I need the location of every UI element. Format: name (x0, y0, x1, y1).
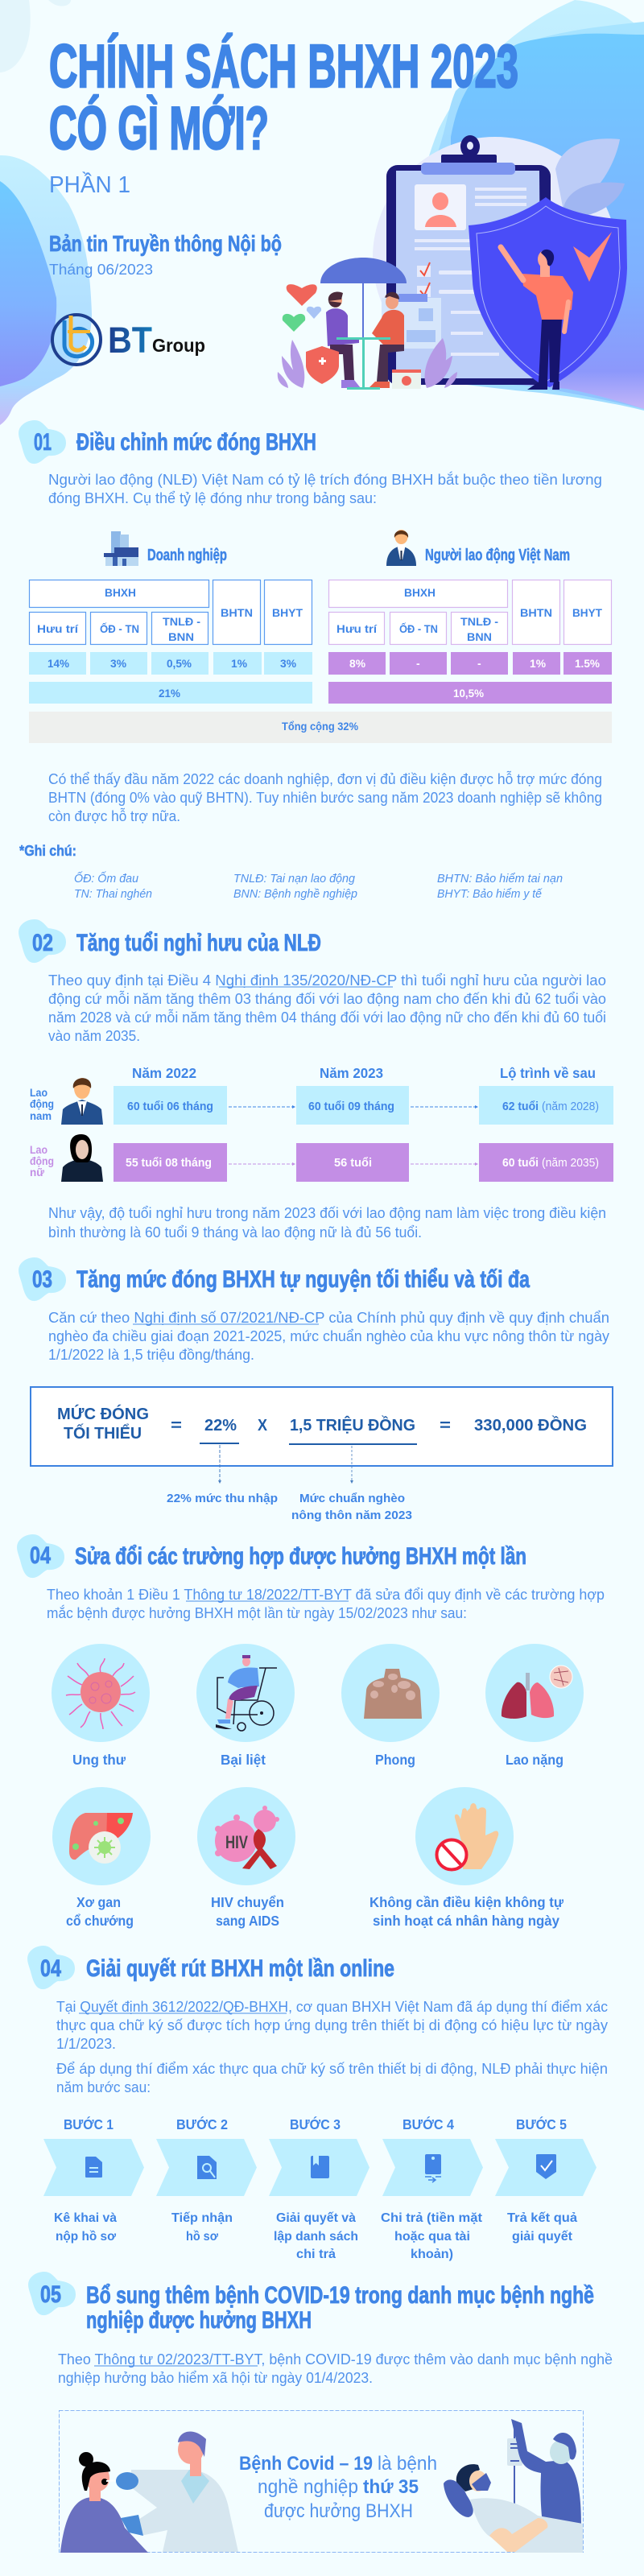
step 3: Giải quyết và (276, 2211, 356, 2225)
section 04b intro text: Để áp dụng thí điểm xác thực qua chữ ký số trên thiết bị di động, NLĐ phải thực hiện (56, 2061, 608, 2077)
step 1: BƯỚC 1 (64, 2116, 114, 2132)
notes legend (74, 871, 563, 901)
card: unable to self-care (369, 1787, 564, 1929)
table: employee contribution: 8% (349, 657, 366, 670)
section 04 badge: 04 (30, 1542, 51, 1569)
card: HIV to AIDS (197, 1787, 295, 1929)
table: employee contribution: TNLĐ - (460, 615, 498, 628)
step 3: chi trả (296, 2248, 336, 2261)
section 01 explanation text: còn được hỗ trợ nữa. (48, 807, 180, 824)
table: company contribution: TNLĐ - (163, 615, 200, 628)
illustration: clipboard, shield and people (278, 135, 627, 390)
table: employee contribution: Hưu trí (336, 622, 378, 635)
logo: BT Group (52, 315, 205, 365)
subtitle: part: PHẦN 1 (49, 171, 130, 198)
row: male workers (30, 1078, 613, 1125)
card: cancer (52, 1644, 150, 1768)
title (49, 32, 518, 162)
formula box: X (258, 1417, 268, 1435)
illustration: swab test (60, 2431, 238, 2553)
table: company contribution: BNN (168, 630, 194, 643)
notes heading: *Ghi chú: (19, 843, 76, 859)
card: severe tuberculosis: Lao nặng (506, 1752, 564, 1768)
retirement timeline: Năm 2022 (132, 1065, 196, 1081)
row: male workers: 62 tuổi (502, 1100, 539, 1113)
card: unable to self-care: Không cần điều kiện không tự (369, 1894, 564, 1910)
card: unable to self-care: sinh hoạt cá nhân hàng ngày (373, 1913, 559, 1929)
section 03 intro text: 1/1/2022 là 1,5 triệu đồng/tháng. (48, 1347, 254, 1363)
notes legend: BHTN: Bảo hiểm tai nạn (437, 872, 563, 886)
section 01 badge: 01 (34, 429, 52, 456)
card: paralysis (196, 1644, 295, 1768)
total row (29, 712, 612, 743)
section 04b badge: 04 (40, 1955, 61, 1982)
step 5 (495, 2116, 597, 2244)
total row: Tổng cộng 32% (282, 720, 359, 733)
section 04b intro text (56, 1999, 608, 2095)
date: Tháng 06/2023 (49, 262, 153, 278)
row: female workers: nữ (30, 1166, 45, 1179)
section 01 intro text: Người lao động (NLĐ) Việt Nam có tỷ lệ trích đóng BHXH bắt buộc theo tiền lương (48, 471, 602, 488)
step 4: hoặc qua tài (394, 2230, 470, 2244)
formula box: 1,5 TRIỆU ĐỒNG (290, 1415, 415, 1435)
formula annotations: Mức chuẩn nghèo (299, 1492, 405, 1505)
section 05 intro text: Theo Thông tư 02/2023/TT-BYT, bệnh COVID-19 được thêm vào danh mục bệnh nghề (58, 2351, 613, 2368)
row: male workers: 60 tuổi 06 tháng (127, 1100, 213, 1113)
section 02 badge (19, 919, 66, 963)
section 01 explanation text: BHTN (đóng 0% vào quỹ BHTN). Tuy nhiên bước sang năm 2023 doanh nghiệp sẽ không (48, 790, 602, 806)
illustration: patient and nurse (444, 2419, 583, 2553)
card: cancer: Ung thư (72, 1752, 126, 1768)
step 3: BƯỚC 3 (290, 2116, 341, 2132)
section 01 explanation text (48, 770, 602, 824)
table: employee contribution: BNN (467, 630, 492, 643)
section 02 badge: 02 (32, 930, 53, 956)
card: HIV to AIDS: HIV chuyển (211, 1894, 284, 1910)
section 01 heading: Điều chỉnh mức đóng BHXH (76, 429, 316, 456)
section 02 intro text: năm 2028 và cứ mỗi năm tăng thêm 04 tháng đối với lao động nữ cho đến khi đủ 60 tuổi (48, 1009, 606, 1026)
table heading: employee: Người lao động Việt Nam (425, 547, 570, 564)
section 03 intro text: nghèo đa chiều giai đoạn 2021-2025, mức chuẩn nghèo của khu vực nông thôn từ ngày (48, 1328, 609, 1344)
row: male workers: Lao (30, 1086, 47, 1099)
logo: BT Group: Group (152, 335, 205, 356)
section 03 intro text: Căn cứ theo Nghị định số 07/2021/NĐ-CP của Chính phủ quy định về quy định chuẩn (48, 1310, 609, 1326)
notes legend: TNLĐ: Tai nạn lao động (233, 872, 356, 886)
table: employee contribution (328, 580, 612, 704)
covid callout panel (60, 2410, 583, 2553)
row: female workers: 56 tuổi (334, 1156, 372, 1170)
step 2: Tiếp nhận (171, 2211, 233, 2225)
table: employee contribution: BHXH (404, 586, 436, 599)
section 04 badge (17, 1534, 64, 1578)
table: employee contribution: ỐĐ - TN (399, 621, 438, 635)
callout text: Bệnh Covid – 19 (239, 2453, 373, 2475)
section 03 intro text (48, 1310, 609, 1363)
section 01 explanation text: Có thể thấy đầu năm 2022 các doanh nghiệp, đơn vị đủ điều kiện được hỗ trợ mức đóng (48, 770, 602, 787)
section 04 intro text: mắc bệnh được hưởng BHXH một lần từ ngày 15/02/2023 như sau: (47, 1604, 467, 1621)
table: company contribution: 0,5% (167, 657, 192, 670)
section 02 conclusion text: Như vậy, độ tuổi nghỉ hưu trong năm 2023 đối với lao động nam làm việc trong điều kiện (48, 1205, 606, 1221)
table: employee contribution: 1.5% (575, 657, 601, 670)
row: male workers: động (30, 1097, 54, 1110)
step 3 (269, 2116, 369, 2261)
table: employee contribution: - (416, 657, 420, 670)
section 05 intro text: nghiệp hưởng bảo hiểm xã hội từ ngày 01/4/2023. (58, 2370, 373, 2386)
row: male workers: nam (30, 1109, 52, 1122)
formula box: 22% (204, 1417, 237, 1435)
section 02 conclusion text (48, 1205, 606, 1241)
notes legend: ỐĐ: Ốm đau (74, 871, 139, 886)
section 05 badge (28, 2272, 76, 2315)
card: cirrhosis (52, 1787, 151, 1929)
card: leprosy: Phong (375, 1752, 415, 1768)
table: company contribution: 3% (110, 657, 127, 670)
title: CÓ GÌ MỚI? (49, 94, 269, 162)
table: employee contribution: BHYT (572, 606, 602, 619)
formula box: MỨC ĐÓNG (57, 1404, 149, 1423)
table: company contribution (29, 580, 312, 704)
table: employee contribution: 10,5% (453, 687, 485, 700)
retirement timeline: Lộ trình về sau (500, 1065, 596, 1081)
table: company contribution: BHYT (272, 606, 303, 619)
step 1: nộp hồ sơ (56, 2230, 117, 2244)
callout text: thứ 35 (363, 2476, 419, 2498)
formula box: = (171, 1417, 182, 1435)
notes legend: BHYT: Bảo hiểm y tế (437, 887, 543, 901)
table: company contribution: BHXH (105, 586, 136, 599)
section 01 badge (19, 420, 66, 464)
card: severe tuberculosis (485, 1644, 584, 1768)
section 02 intro text: động cứ mỗi năm tăng thêm 03 tháng đối với lao động nam cho đến khi đủ 62 tuổi vào (48, 990, 606, 1007)
table: employee contribution: - (477, 657, 481, 670)
formula annotations (167, 1445, 412, 1522)
section 05 heading: nghiệp được hưởng BHXH (86, 2307, 312, 2334)
section 05 heading (86, 2282, 594, 2334)
section 04b intro text: Tại Quyết định 3612/2022/QĐ-BHXH, cơ quan BHXH Việt Nam đã áp dụng thí điểm xác (56, 1999, 608, 2015)
card: HIV to AIDS: sang AIDS (216, 1913, 279, 1929)
row: female workers: (năm 2035) (542, 1156, 599, 1170)
step 1 (43, 2116, 144, 2244)
table: company contribution: 3% (280, 657, 297, 670)
callout text: được hưởng BHXH (264, 2500, 413, 2522)
section 02 conclusion text: bình thường là 60 tuổi 9 tháng và lao động nữ là đủ 56 tuổi. (48, 1224, 422, 1241)
section 01 intro text: đóng BHXH. Cụ thể tỷ lệ đóng như trong bảng sau: (48, 490, 377, 506)
table: company contribution: Hưu trí (37, 622, 79, 635)
step 2 (156, 2116, 257, 2244)
section 02 intro text: vào năm 2035. (48, 1028, 140, 1044)
step 4: khoản) (411, 2248, 453, 2261)
row: male workers: 60 tuổi 09 tháng (308, 1100, 394, 1113)
table: company contribution: BHTN (221, 606, 253, 619)
table: company contribution: ỐĐ - TN (100, 621, 139, 635)
formula box: = (440, 1417, 451, 1435)
section 03 badge: 03 (32, 1266, 52, 1293)
card: cirrhosis: cổ chướng (66, 1913, 134, 1929)
row: female workers (30, 1134, 613, 1182)
section 04b intro text: thực qua chữ ký số được tích hợp ứng dụng trên thiết bị di động có hiệu lực từ ngày (56, 2017, 608, 2033)
icon: male worker (386, 530, 416, 566)
section 04 intro text (47, 1587, 605, 1621)
table: company contribution: 21% (159, 687, 181, 700)
newsletter label: Bản tin Truyền thông Nội bộ (49, 231, 282, 256)
card: HIV to AIDS: HIV (225, 1832, 248, 1852)
formula annotations: nông thôn năm 2023 (291, 1509, 412, 1522)
section 02 intro text: Theo quy định tại Điều 4 Nghị định 135/2020/NĐ-CP thì tuổi nghỉ hưu của người lao (48, 972, 606, 989)
formula box: 330,000 ĐỒNG (474, 1415, 587, 1435)
section 04b heading: Giải quyết rút BHXH một lần online (86, 1955, 394, 1982)
section 01 intro text (48, 471, 602, 506)
callout text: là bệnh (378, 2453, 437, 2475)
row: male workers: (năm 2028) (542, 1100, 599, 1113)
card: leprosy (341, 1644, 440, 1768)
row: female workers: động (30, 1154, 54, 1167)
step 1: Kê khai và (54, 2211, 117, 2225)
section 02 heading: Tăng tuổi nghỉ hưu của NLĐ (76, 930, 321, 956)
step 4: BƯỚC 4 (402, 2116, 454, 2132)
retirement timeline (30, 1065, 613, 1182)
section 04 intro text: Theo khoản 1 Điều 1 Thông tư 18/2022/TT-BYT đã sửa đổi quy định về các trường hợp (47, 1587, 605, 1603)
step 5: giải quyết (512, 2230, 572, 2244)
formula annotations: 22% mức thu nhập (167, 1492, 278, 1505)
table: employee contribution: 1% (530, 657, 547, 670)
row: female workers: 60 tuổi (502, 1156, 539, 1170)
step 2: hồ sơ (186, 2230, 219, 2244)
table: company contribution: 1% (231, 657, 248, 670)
notes legend: BNN: Bệnh nghề nghiệp (233, 887, 357, 901)
table: employee contribution: BHTN (520, 606, 552, 619)
table: company contribution: 14% (47, 657, 70, 670)
card: paralysis: Bại liệt (221, 1752, 266, 1768)
step 2: BƯỚC 2 (176, 2116, 228, 2132)
row: female workers: 55 tuổi 08 tháng (126, 1156, 212, 1170)
table heading: company: Doanh nghiệp (147, 547, 227, 564)
section 04b intro text: 1/1/2023. (56, 2036, 116, 2052)
logo: BT Group: BT (108, 320, 152, 361)
step 4: Chi trả (tiền mặt (381, 2211, 482, 2225)
step 3: lập danh sách (274, 2230, 358, 2244)
callout text: nghề nghiệp (258, 2476, 358, 2498)
section 04b badge (27, 1946, 75, 1989)
section 05 intro text (58, 2351, 613, 2386)
callout text (239, 2453, 437, 2522)
retirement timeline: Năm 2023 (320, 1065, 383, 1081)
section 03 badge (19, 1257, 66, 1301)
section 04b intro text: năm bước sau: (56, 2079, 151, 2095)
row: female workers: Lao (30, 1143, 47, 1156)
formula box: TỐI THIỂU (64, 1423, 142, 1443)
icon: building (104, 531, 138, 566)
section 02 intro text (48, 972, 606, 1044)
header decorative background (0, 0, 644, 425)
notes legend: TN: Thai nghén (74, 887, 152, 901)
step 4 (381, 2116, 483, 2261)
section 05 badge: 05 (40, 2281, 61, 2308)
step 5: BƯỚC 5 (516, 2116, 567, 2132)
formula box (31, 1387, 613, 1466)
card: cirrhosis: Xơ gan (76, 1894, 121, 1910)
step 5: Trả kết quả (507, 2211, 577, 2225)
